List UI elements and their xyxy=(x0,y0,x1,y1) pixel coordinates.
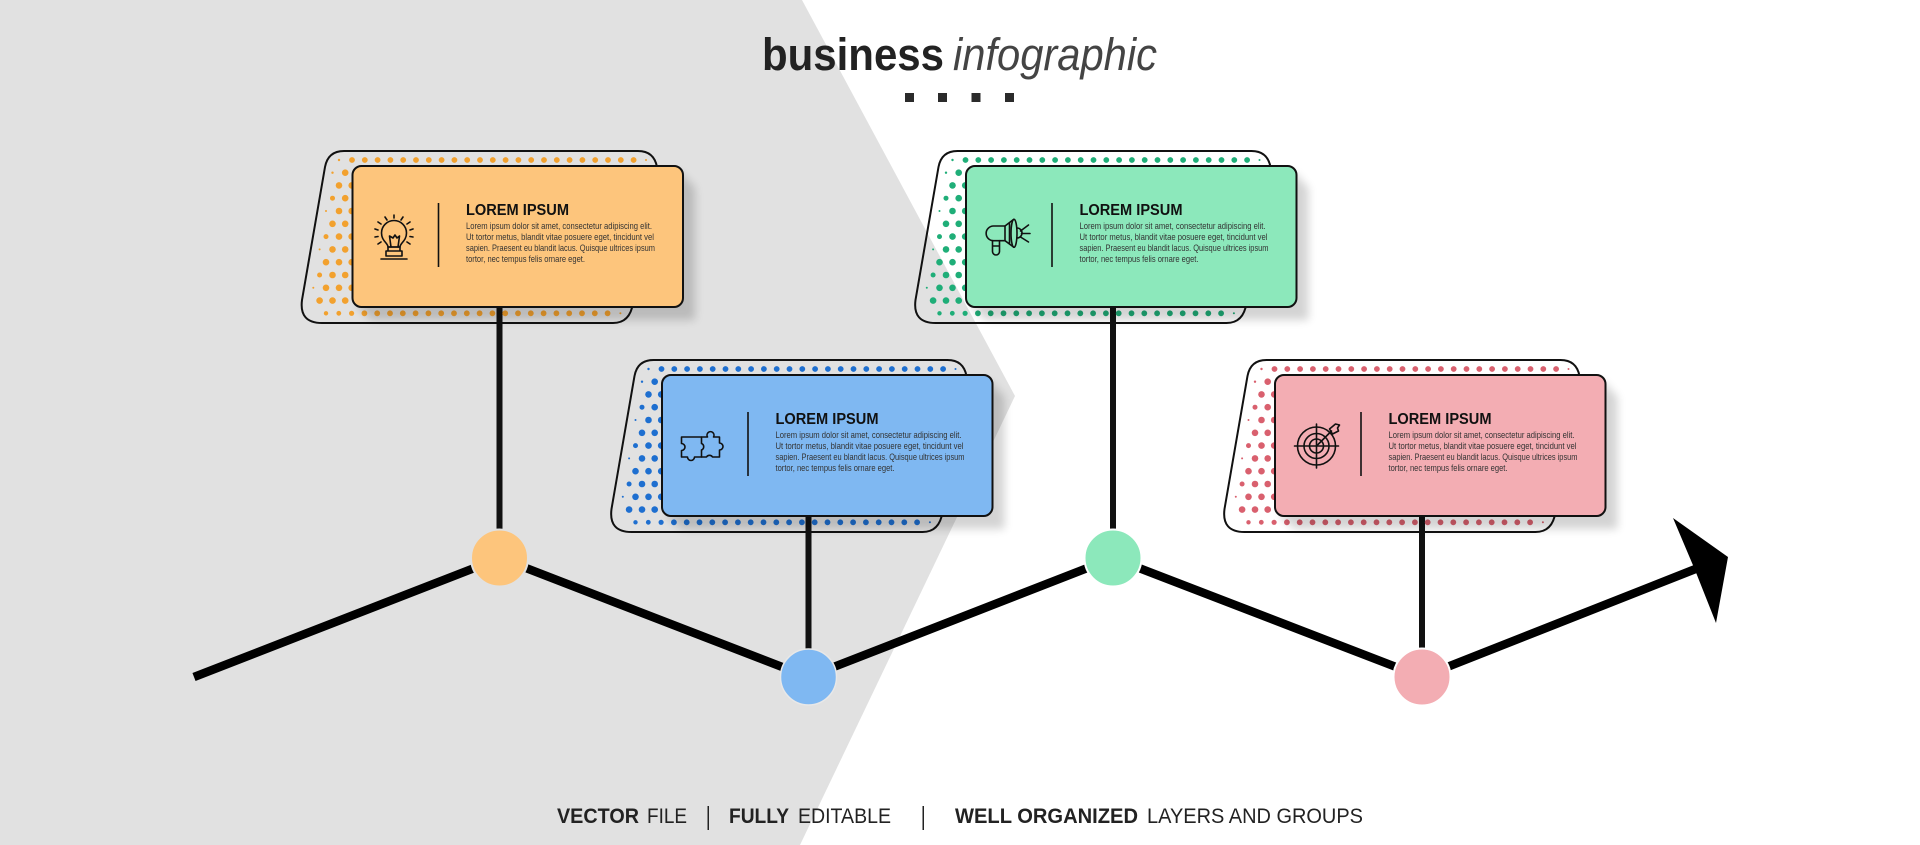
title dots xyxy=(905,93,1014,102)
card text: LOREM IPSUM xyxy=(1388,411,1492,428)
panel: pink card xyxy=(1224,360,1618,532)
card text: LOREM IPSUM xyxy=(1080,202,1182,219)
card text: LOREM IPSUM xyxy=(776,411,878,428)
card text: LOREM IPSUM xyxy=(466,202,569,219)
card text: Lorem ipsum dolor sit amet, consectetur adipiscing elit. xyxy=(1388,430,1574,441)
card text xyxy=(776,411,965,474)
footer caption xyxy=(557,805,1363,830)
card text: tortor, nec tempus felis ornare eget. xyxy=(466,254,585,265)
arrowhead xyxy=(1673,518,1728,623)
card text: sapien. Praesent eu blandit lacus. Quisque ultrices ipsum xyxy=(466,243,655,254)
divider xyxy=(438,203,440,267)
card text: Ut tortor metus, blandit vitae posuere eget, tincidunt vel xyxy=(1080,232,1268,243)
card text: Ut tortor metus, blandit vitae posuere eget, tincidunt vel xyxy=(776,441,964,452)
icon: puzzle pieces xyxy=(682,432,723,460)
timeline node: pink xyxy=(1394,648,1450,706)
card text: Lorem ipsum dolor sit amet, consectetur adipiscing elit. xyxy=(466,221,652,232)
panel: green card xyxy=(915,151,1308,323)
footer caption: VECTOR xyxy=(557,805,639,828)
connector stems xyxy=(500,300,1422,655)
divider xyxy=(1360,412,1362,476)
timeline node: green xyxy=(1084,530,1142,586)
divider xyxy=(1051,203,1053,267)
card text: sapien. Praesent eu blandit lacus. Quisque ultrices ipsum xyxy=(776,452,965,463)
card text: Ut tortor metus, blandit vitae posuere eget, tincidunt vel xyxy=(466,232,654,243)
background panel: grey arrow shape xyxy=(0,0,1015,845)
title: business xyxy=(762,29,944,80)
card text xyxy=(1080,202,1269,265)
card text: tortor, nec tempus felis ornare eget. xyxy=(776,463,894,474)
icon: light bulb xyxy=(375,215,413,259)
card text: Lorem ipsum dolor sit amet, consectetur adipiscing elit. xyxy=(1080,221,1266,232)
footer caption: WELL ORGANIZED xyxy=(955,805,1138,828)
title xyxy=(762,29,1157,80)
zigzag timeline line xyxy=(194,558,1698,677)
timeline node: blue xyxy=(780,649,836,705)
title: infographic xyxy=(953,29,1157,80)
icon: target with arrow xyxy=(1294,424,1340,468)
card text xyxy=(1388,411,1578,474)
footer caption: LAYERS AND GROUPS xyxy=(1147,805,1363,828)
panel: orange card xyxy=(302,151,695,323)
card text: Lorem ipsum dolor sit amet, consectetur adipiscing elit. xyxy=(776,430,962,441)
card text: sapien. Praesent eu blandit lacus. Quisque ultrices ipsum xyxy=(1388,452,1578,463)
footer caption: EDITABLE xyxy=(798,805,891,828)
footer caption: FILE xyxy=(647,805,687,828)
card text xyxy=(466,202,655,265)
footer caption: FULLY xyxy=(729,805,789,828)
divider xyxy=(747,412,749,476)
timeline node: orange xyxy=(471,530,528,586)
card text: sapien. Praesent eu blandit lacus. Quisque ultrices ipsum xyxy=(1080,243,1269,254)
card text: Ut tortor metus, blandit vitae posuere eget, tincidunt vel xyxy=(1388,441,1576,452)
card text: tortor, nec tempus felis ornare eget. xyxy=(1080,254,1198,265)
panel: blue card xyxy=(611,360,1004,532)
icon: megaphone xyxy=(986,219,1030,255)
card text: tortor, nec tempus felis ornare eget. xyxy=(1388,463,1508,474)
